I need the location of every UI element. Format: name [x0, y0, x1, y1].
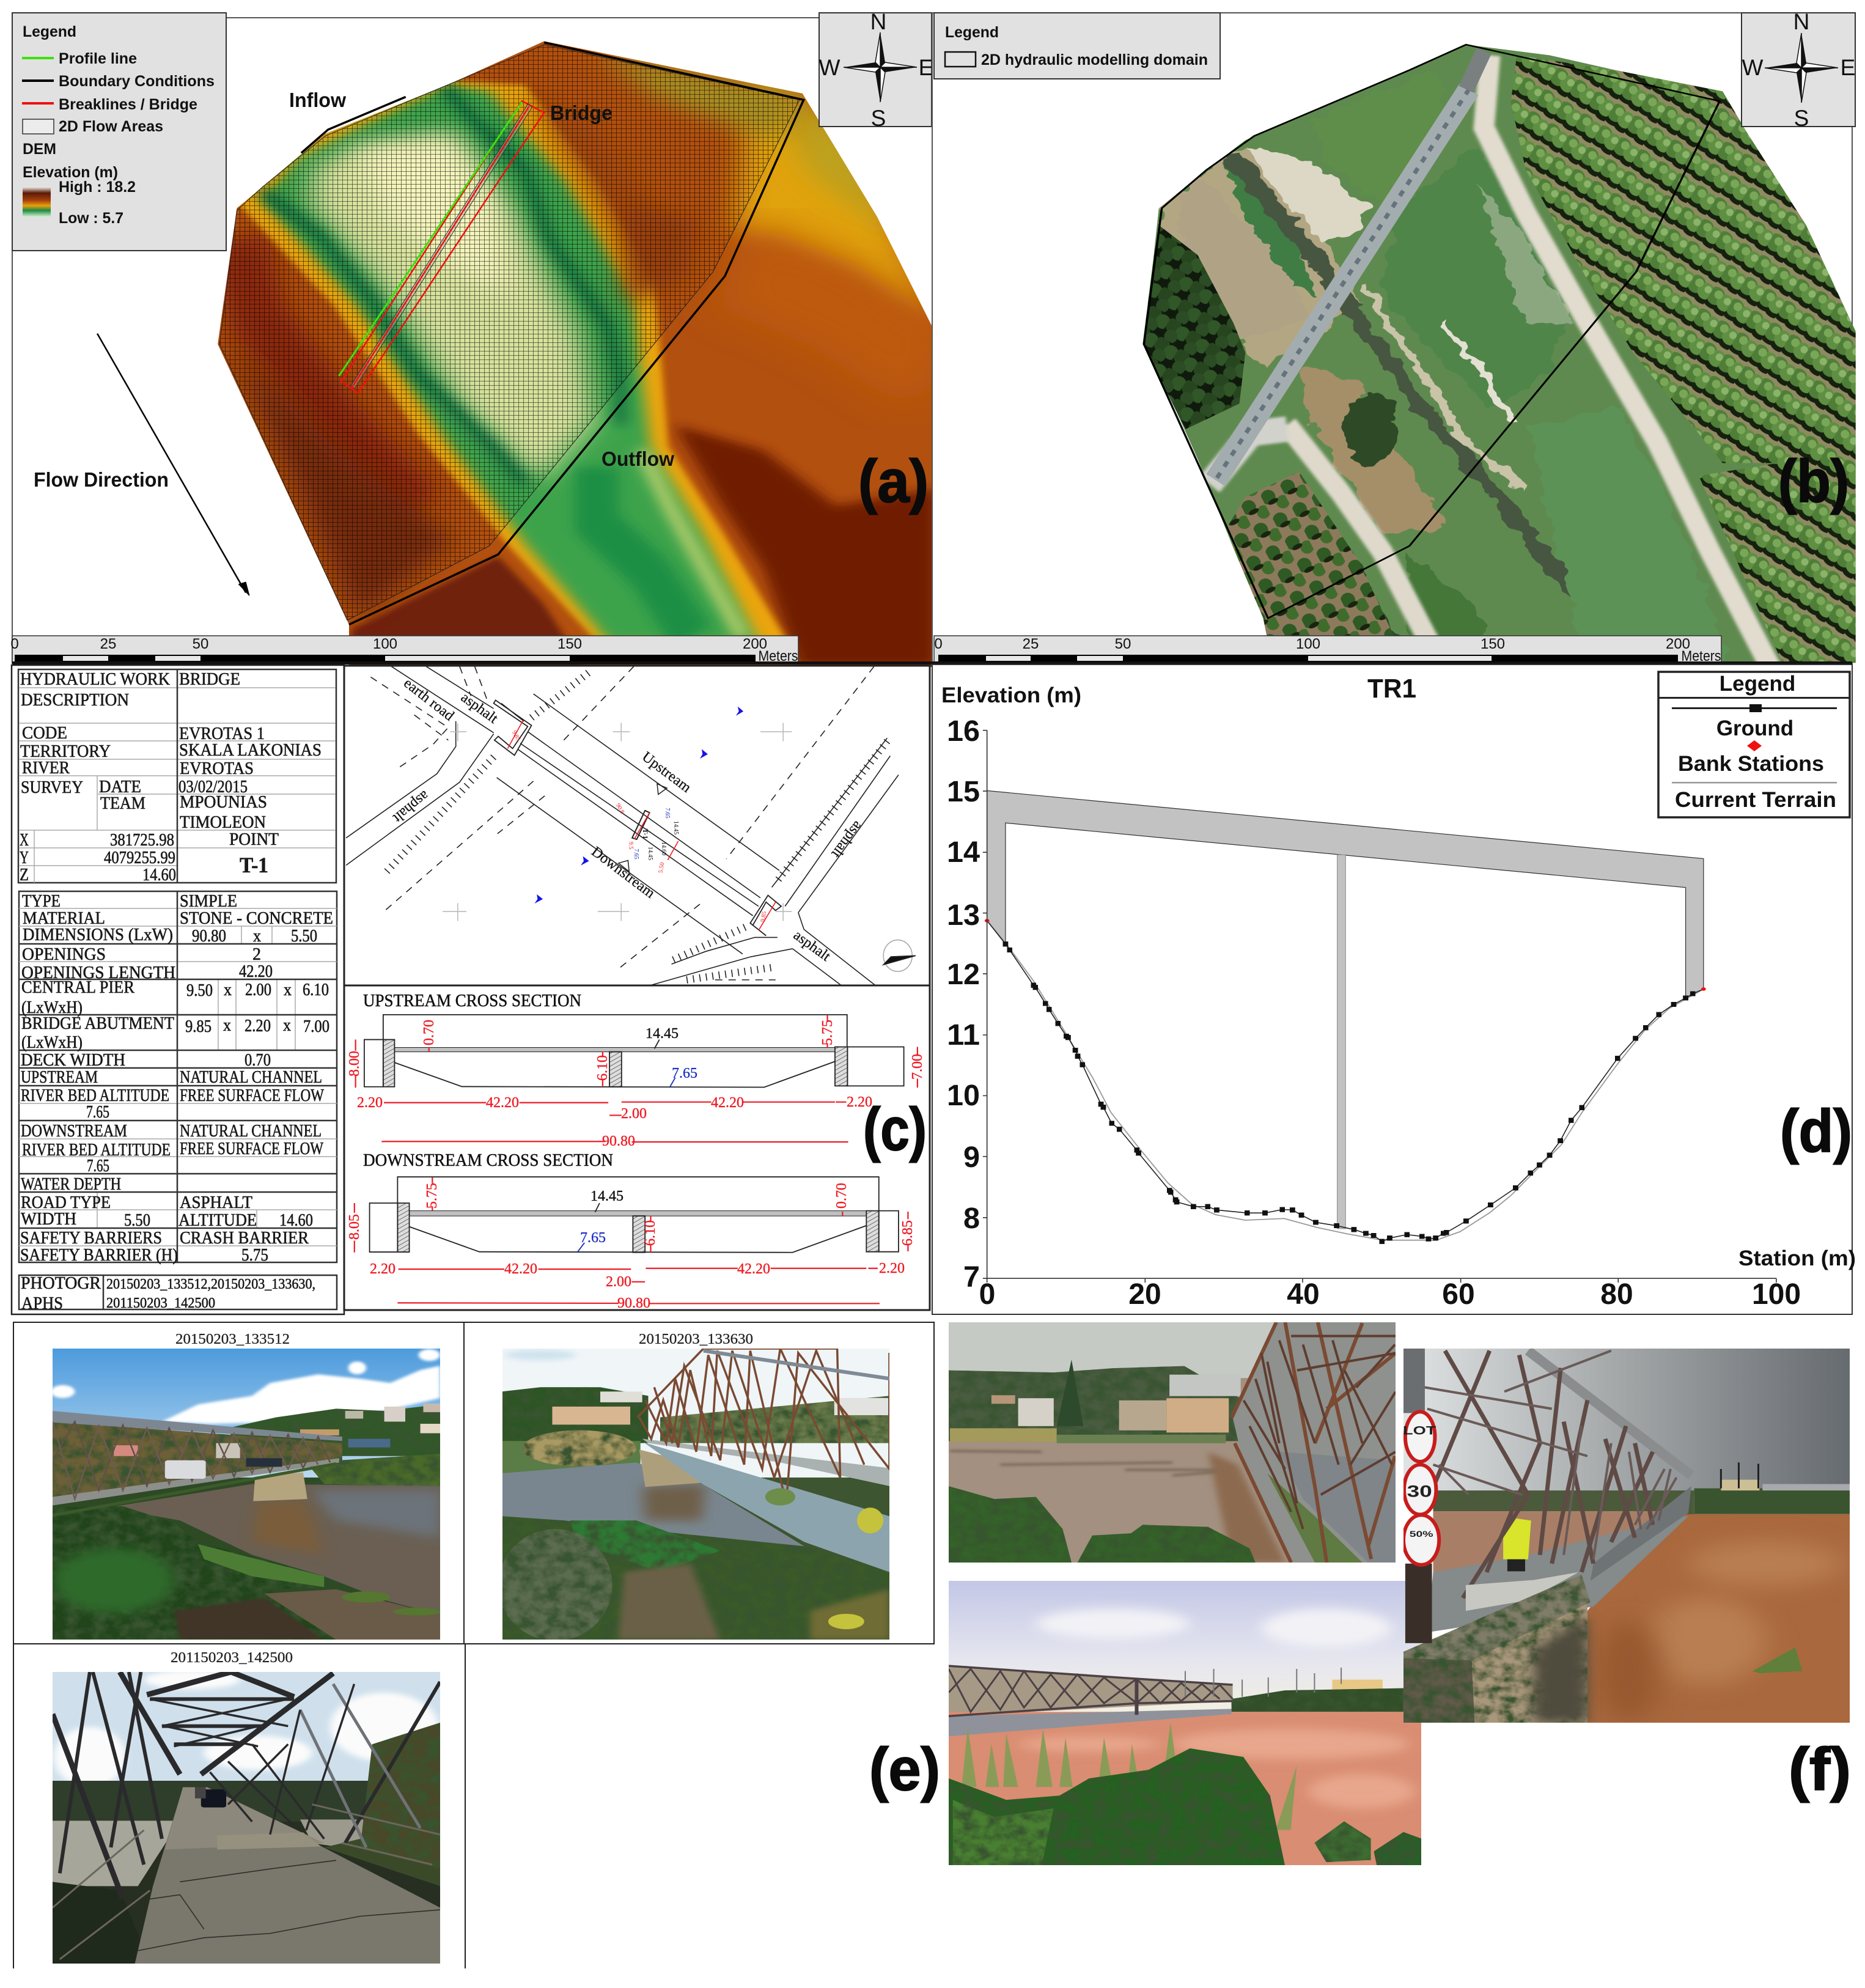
upstream dimensions: 8.00: [347, 1051, 362, 1077]
downstream dimensions: 2.00: [606, 1274, 631, 1290]
flood photo 3: 30: [1407, 1482, 1432, 1500]
panel d: cross section chart: [932, 665, 1856, 1314]
legend panel a: DEM: [23, 141, 56, 158]
y axis numbers: 14: [947, 836, 980, 869]
identification table: EVROTAS: [180, 759, 254, 778]
map labels panel a: Bridge: [550, 101, 612, 124]
structure attributes table: 90.80: [192, 927, 226, 946]
legend panel a: Legend: [23, 23, 76, 40]
cross sections box: [344, 985, 930, 1311]
north arrow panel b: [1742, 9, 1855, 131]
downstream dimensions: 2.20: [370, 1261, 395, 1277]
legend panel b: [934, 13, 1220, 79]
DEM elevation raster: [179, 34, 955, 671]
2D domain outline: [1144, 45, 1720, 618]
chart axis titles: TR1: [1367, 674, 1416, 704]
downstream dimensions: 0.70: [834, 1183, 850, 1209]
plan small dimension labels: 90.8: [614, 802, 625, 815]
structure attributes table: (LxWxH): [21, 1033, 83, 1052]
identification table: 14.60: [142, 866, 176, 885]
north arrow panel a: S: [871, 106, 886, 131]
photo 3: view along deck: [53, 1672, 440, 1964]
map labels panel a: [34, 89, 674, 491]
upstream dimensions: 7.00: [910, 1054, 925, 1080]
plan small dimension labels: [510, 729, 768, 922]
upstream dimensions: 7.65: [672, 1066, 697, 1081]
panel c: survey sheet: [12, 665, 930, 1314]
legend panel a: Elevation (m): [23, 164, 118, 181]
identification table: X: [20, 831, 29, 850]
map labels panel a: Inflow: [289, 89, 346, 111]
structure attributes table: [19, 891, 337, 1265]
structure attributes table: 5.75: [241, 1246, 268, 1265]
identification table: 381725.98: [110, 831, 174, 850]
x axis numbers: 100: [1752, 1278, 1801, 1311]
structure attributes table: OPENINGS LENGTH: [21, 963, 175, 982]
scale bar panel b: 0: [934, 636, 943, 652]
flood photo 2: [949, 1581, 1421, 1865]
map labels panel a: Outflow: [601, 447, 674, 470]
plan small dimension labels: 7.65: [664, 808, 671, 819]
scale bar panel b: 150: [1481, 636, 1505, 652]
downstream dimensions: 7.65: [580, 1230, 606, 1246]
photographs table: APHS: [21, 1294, 63, 1313]
structure attributes table: TYPE: [22, 892, 61, 911]
identification table: Y: [20, 849, 29, 867]
identification table: DATE: [99, 778, 141, 797]
downstream dimensions: 90.80: [617, 1295, 650, 1311]
scale bar panel b: [934, 636, 1721, 665]
x axis numbers: 60: [1442, 1278, 1475, 1311]
orchard lower left: [1227, 472, 1394, 636]
structure attributes table: OPENINGS: [22, 945, 106, 964]
y axis numbers: 11: [947, 1019, 980, 1051]
upstream dimensions: 42.20: [486, 1095, 519, 1111]
north arrow panel b: N: [1793, 9, 1809, 34]
structure attributes table: UPSTREAM: [21, 1068, 98, 1087]
plan view drawing: [344, 666, 930, 986]
identification table: BRIDGE: [179, 670, 240, 689]
x axis numbers: 80: [1600, 1278, 1633, 1311]
north arrow panel b: E: [1841, 55, 1855, 80]
structure attributes table: 0.70: [245, 1051, 271, 1070]
panel label d: (d): [1780, 1097, 1852, 1165]
y axis numbers: 7: [963, 1261, 980, 1294]
plan small dimension labels: 9.85: [510, 729, 521, 742]
structure attributes table: 9.85: [185, 1017, 212, 1036]
structure attributes table: SIMPLE: [180, 892, 237, 911]
upstream dimensions: 5.75: [820, 1020, 836, 1045]
y axis numbers: 16: [947, 715, 980, 748]
caption photo 1: 20150203_133512: [175, 1331, 290, 1347]
upstream dimensions: 6.10: [595, 1055, 611, 1081]
scale bar panel a: 100: [373, 636, 397, 652]
panel label f: (f): [1789, 1736, 1851, 1803]
scale bar panel b: 50: [1115, 636, 1131, 652]
identification table: T-1: [240, 853, 268, 877]
identification table: HYDRAULIC WORK: [20, 670, 170, 689]
chart legend: [1658, 672, 1850, 817]
upstream cross section drawing: [356, 1015, 918, 1142]
structure attributes table: 5.50: [291, 927, 317, 946]
identification table: RIVER: [22, 759, 70, 778]
downstream dimensions: 14.45: [590, 1188, 624, 1204]
north arrow panel b: S: [1794, 106, 1809, 131]
panel b: orthophoto map: [932, 9, 1865, 688]
structure attributes table: 42.20: [239, 962, 273, 981]
caption photo 2: 20150203_133630: [639, 1331, 753, 1347]
plan road labels: earth road: [400, 676, 457, 724]
boundary condition lines, bridge breaklines, flow arrow: [97, 43, 804, 625]
photographs table: [19, 1274, 337, 1313]
structure attributes table: 7.65: [87, 1157, 109, 1176]
identification table: DESCRIPTION: [21, 691, 129, 710]
north arrow panel a: [819, 9, 933, 131]
structure attributes table: WIDTH: [21, 1210, 76, 1229]
x axis numbers: 0: [979, 1278, 995, 1311]
structure attributes table: x: [224, 981, 232, 1000]
structure attributes table: CRASH BARRIER: [180, 1229, 309, 1248]
plan view drawing: Upstream: [639, 749, 694, 796]
photo grid lines: [13, 1322, 934, 1968]
upstream cross section heading: UPSTREAM CROSS SECTION: [363, 991, 581, 1011]
plan small dimension labels: 9.85: [760, 911, 768, 922]
chart axis titles: [941, 674, 1856, 1270]
survey sheet frame: [12, 665, 344, 1314]
photo 2: truss from below: [502, 1349, 889, 1640]
structure attributes table: x: [253, 927, 261, 946]
plan linework: [346, 666, 916, 986]
identification table: Z: [20, 866, 29, 885]
plan small dimension labels: 7.65: [633, 849, 639, 860]
structure attributes table: ASPHALT: [180, 1193, 252, 1212]
structure attributes table: 14.60: [279, 1211, 313, 1230]
map frame a: [12, 18, 932, 663]
upstream dimensions: 2.00: [621, 1106, 647, 1122]
map labels panel a: Flow Direction: [34, 468, 169, 491]
plan small dimension labels: 5.50: [658, 862, 666, 874]
structure attributes table: ROAD TYPE: [21, 1193, 111, 1212]
structure attributes table: 9.50: [186, 981, 213, 1000]
downstream dimensions: 2.20: [879, 1261, 905, 1276]
structure attributes table: FREE SURFACE FLOW: [180, 1139, 323, 1158]
scale bar panel a: 0: [10, 636, 19, 652]
upstream dimensions: 2.20: [847, 1094, 872, 1110]
flood photo 3: [1403, 1349, 1850, 1723]
downstream cross section heading: DOWNSTREAM CROSS SECTION: [363, 1150, 613, 1170]
orchard right: [1511, 56, 1856, 463]
structure attributes table: SAFETY BARRIERS: [20, 1229, 162, 1248]
upstream dimensions: 2.20: [357, 1095, 383, 1111]
scale bar panel a: 150: [557, 636, 582, 652]
structure attributes table: 2.00: [245, 981, 271, 1000]
panel f: flood photos: [949, 1322, 1851, 1865]
legend panel a: High : 18.2: [59, 179, 136, 196]
downstream cross section drawing: [355, 1177, 908, 1303]
y axis numbers: 8: [963, 1202, 980, 1235]
flood photo 1: [949, 1322, 1396, 1563]
identification table: SKALA LAKONIAS: [179, 741, 322, 760]
structure attributes table: SAFETY BARRIER (H): [20, 1246, 178, 1265]
caption photo 3: 201150203_142500: [171, 1650, 293, 1666]
identification table: CODE: [22, 724, 67, 743]
plan small dimension labels: 14.60: [660, 842, 667, 855]
orchard lower right: [1699, 450, 1856, 663]
structure attributes table: RIVER BED ALTITUDE: [21, 1086, 169, 1105]
scale bar panel b: 100: [1296, 636, 1320, 652]
structure attributes table: 7.65: [86, 1103, 109, 1122]
x axis numbers: 20: [1128, 1278, 1161, 1311]
chart axis titles: Elevation (m): [941, 683, 1081, 707]
upstream dimensions: 0.70: [421, 1020, 437, 1045]
bridge deck, pier, ground and terrain profile: [983, 731, 1776, 1283]
downstream dimensions: 42.20: [737, 1261, 770, 1277]
chart legend: Bank Stations: [1678, 752, 1824, 776]
identification table: 03/02/2015: [178, 778, 248, 797]
identification table: [18, 669, 336, 885]
identification table: SURVEY: [21, 778, 83, 797]
structure attributes table: 2.20: [245, 1017, 271, 1036]
structure attributes table: 5.50: [124, 1211, 150, 1230]
orthophoto base: [1142, 45, 1856, 663]
downstream dimensions: 42.20: [504, 1261, 537, 1277]
upstream dimensions: 14.45: [646, 1026, 679, 1042]
x axis numbers: 40: [1287, 1278, 1320, 1311]
panel label b: (b): [1778, 447, 1849, 515]
upstream dimensions: [347, 1020, 925, 1149]
photographs table: 20150203_133512,20150203_133630,: [106, 1276, 315, 1292]
structure attributes table: FREE SURFACE FLOW: [180, 1086, 324, 1105]
scale bar panel a: 50: [193, 636, 208, 652]
north arrow panel a: E: [919, 55, 933, 80]
photographs table: PHOTOGR: [21, 1274, 101, 1293]
structure attributes table: WATER DEPTH: [21, 1175, 121, 1194]
structure attributes table: 2: [252, 945, 261, 964]
plan small dimension labels: 14.45: [647, 847, 653, 860]
structure attributes table: MATERIAL: [23, 909, 105, 928]
structure attributes table: x: [284, 981, 292, 1000]
structure attributes table: 7.00: [303, 1017, 329, 1036]
structure attributes table: DOWNSTREAM: [21, 1122, 127, 1141]
legend panel a: Breaklines / Bridge: [59, 96, 197, 113]
plan small dimension labels: 9.5: [627, 842, 634, 849]
legend panel a: Profile line: [59, 50, 137, 67]
scale bar panel b: 25: [1023, 636, 1039, 652]
y axis numbers: 9: [963, 1141, 980, 1174]
x axis numbers: [979, 1278, 1801, 1311]
roads and bridge deck: [1210, 51, 1770, 667]
orchard left: [1143, 226, 1246, 429]
scale bar panel a: Meters: [758, 648, 798, 665]
identification table: 4079255.99: [104, 849, 175, 867]
identification table: TERRITORY: [20, 742, 111, 761]
downstream dimensions: 6.10: [642, 1220, 658, 1246]
panel label e: (e): [869, 1736, 940, 1803]
identification table: EVROTAS 1: [179, 724, 265, 743]
panel label a: (a): [858, 447, 929, 515]
plan view drawing: asphalt: [790, 927, 834, 965]
plan view drawing: asphalt: [390, 787, 432, 826]
identification table: POINT: [229, 830, 279, 849]
scale bar panel b: 200: [1666, 636, 1690, 652]
north arrow panel b: W: [1742, 55, 1764, 80]
structure attributes table: x: [223, 1016, 231, 1035]
downstream dimensions: [347, 1183, 916, 1311]
plan view drawing: Downstream: [588, 844, 658, 902]
map frame b: [932, 13, 1852, 663]
y axis numbers: 13: [947, 899, 980, 932]
legend panel a: [12, 13, 226, 251]
structure attributes table: DIMENSIONS (LxW): [23, 926, 173, 944]
plan view drawing: asphalt: [828, 818, 866, 861]
scale bar panel b: Meters: [1681, 648, 1721, 665]
photographs table: 201150203_142500: [106, 1295, 215, 1311]
downstream dimensions: 6.85: [900, 1220, 916, 1246]
structure attributes table: RIVER BED ALTITUDE: [22, 1141, 171, 1160]
chart legend: Legend: [1720, 672, 1795, 696]
y axis numbers: 10: [947, 1080, 980, 1112]
legend panel a: 2D Flow Areas: [59, 118, 163, 135]
scale bar panel a: 200: [743, 636, 767, 652]
flood photo 3: 50%: [1410, 1530, 1433, 1539]
plan view drawing: asphalt: [458, 690, 501, 727]
panel a: hydraulic model DEM map: [10, 9, 955, 671]
chart axis titles: Station (m): [1738, 1246, 1856, 1270]
legend panel b: Legend: [945, 24, 999, 41]
structure attributes table: DECK WIDTH: [21, 1051, 125, 1070]
scale bar panel a: [10, 636, 798, 665]
photo 1: bridge from bank: [53, 1349, 440, 1640]
divider line below maps: [12, 661, 1852, 665]
structure attributes table: (LxWxH): [21, 998, 83, 1017]
structure attributes table: ALTITUDE: [178, 1211, 257, 1230]
downstream dimensions: 5.75: [424, 1183, 440, 1209]
y axis numbers: [947, 715, 980, 1294]
2D flow area mesh: [220, 45, 798, 620]
structure attributes table: NATURAL CHANNEL: [180, 1122, 322, 1141]
y axis numbers: 12: [947, 959, 980, 991]
structure attributes table: NATURAL CHANNEL: [180, 1068, 322, 1087]
chart legend: Ground: [1716, 716, 1793, 740]
chart legend: Current Terrain: [1675, 788, 1836, 812]
north arrow panel a: N: [870, 9, 886, 34]
structure attributes table: 6.10: [303, 981, 329, 1000]
flood photo 3: LOT: [1403, 1424, 1436, 1438]
structure attributes table: BRIDGE ABUTMENT: [21, 1014, 174, 1033]
upstream dimensions: 42.20: [711, 1095, 744, 1111]
panel e: survey photos: [13, 1322, 940, 1968]
downstream dimensions: 8.05: [347, 1214, 362, 1240]
identification table: TEAM: [100, 794, 145, 813]
legend panel a: Boundary Conditions: [59, 73, 215, 90]
panel label c: (c): [863, 1095, 927, 1163]
scale bar panel a: 25: [100, 636, 116, 652]
plan small dimension labels: T-1: [641, 829, 650, 839]
structure attributes table: CENTRAL PIER: [21, 978, 134, 997]
y axis numbers: 15: [947, 776, 980, 808]
structure attributes table: STONE - CONCRETE: [180, 909, 333, 928]
plan small dimension labels: 14.45: [672, 821, 679, 834]
identification table: TIMOLEON: [180, 813, 266, 832]
upstream dimensions: 90.80: [602, 1133, 635, 1149]
legend panel a: Low : 5.7: [59, 210, 123, 227]
identification table: MPOUNIAS: [180, 793, 267, 812]
chart frame: [932, 665, 1852, 1314]
north arrow panel a: W: [819, 55, 841, 80]
structure attributes table: x: [283, 1016, 291, 1035]
legend panel b: 2D hydraulic modelling domain: [981, 51, 1208, 68]
